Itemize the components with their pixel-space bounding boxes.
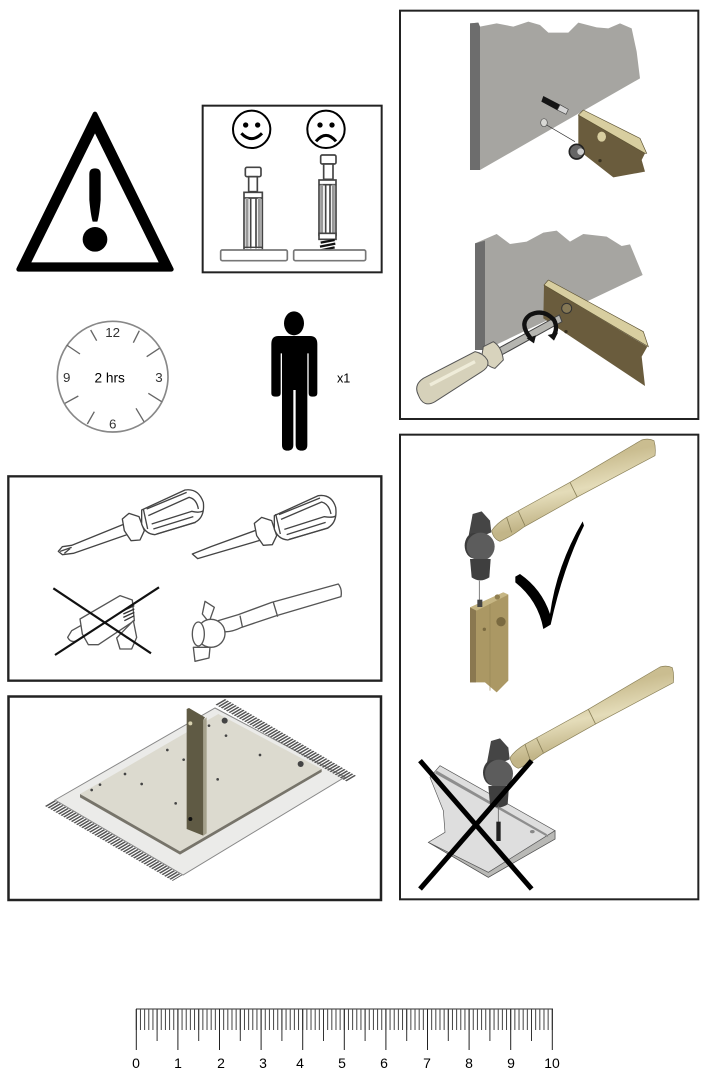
hammer head, incorrect use [483, 738, 513, 807]
hammer, incorrect use [510, 666, 674, 768]
ruler: 3 [259, 1055, 267, 1071]
ruler: 5 [338, 1055, 346, 1071]
panel: hammering correctly and incorrectly [400, 435, 698, 899]
hammer, correct use [465, 439, 655, 601]
icon: sad face [307, 111, 345, 148]
cross-out mark [420, 761, 532, 889]
wall panel, lower [475, 231, 643, 350]
bracket, correct use [470, 592, 508, 692]
bracket, upper [578, 115, 645, 177]
wall panel, upper [470, 22, 640, 170]
icon: happy face [233, 111, 270, 148]
icon: clock, 2 hrs: 6 [109, 416, 116, 431]
mat fringe, lower left [50, 803, 177, 878]
panel: tools [8, 476, 381, 681]
ruler: 9 [507, 1055, 515, 1071]
ruler: 2 [217, 1055, 225, 1071]
icon: one person [271, 311, 350, 451]
icon: clock, 2 hrs: 3 [155, 370, 163, 385]
ruler: 6 [380, 1055, 388, 1071]
icon: cross-head screwdriver [58, 490, 204, 555]
icon: crossed-out power drill [68, 596, 137, 649]
ruler: 8 [465, 1055, 473, 1071]
board [80, 714, 322, 851]
ruler [132, 1009, 560, 1071]
rotation arrow [524, 313, 556, 338]
bracket, lower [543, 285, 647, 386]
ruler: 0 [132, 1055, 140, 1071]
check mark [515, 521, 584, 629]
icon: clock, 2 hrs [57, 321, 168, 432]
ruler: 4 [296, 1055, 304, 1071]
icon: clock, 2 hrs: 12 [105, 325, 120, 340]
base plate [428, 766, 555, 877]
ruler: 1 [174, 1055, 182, 1071]
mat fringe, upper right [220, 702, 352, 779]
board holes [90, 718, 304, 805]
bolt and wall hole [541, 96, 561, 111]
icon: warning triangle [19, 114, 171, 269]
ruler: 10 [544, 1055, 560, 1071]
panel: fixing bracket to wall with screwdriver [400, 11, 698, 419]
protective sheet [55, 708, 345, 875]
icon: clock, 2 hrs: 2 hrs [94, 371, 125, 386]
panel: correct and incorrect bolt fitting [203, 106, 382, 272]
panel: board on protective mat [8, 696, 381, 900]
bolt: incorrect, raised [294, 155, 366, 261]
ruler: 7 [423, 1055, 431, 1071]
icon: one person: x1 [337, 372, 350, 386]
icon: hammer [192, 584, 341, 661]
icon: clock, 2 hrs: 9 [63, 370, 70, 385]
icon: flat-head screwdriver [192, 495, 336, 559]
upright post [187, 708, 205, 836]
bolt: correct, fully seated [221, 167, 287, 261]
screwdriver [498, 315, 562, 355]
